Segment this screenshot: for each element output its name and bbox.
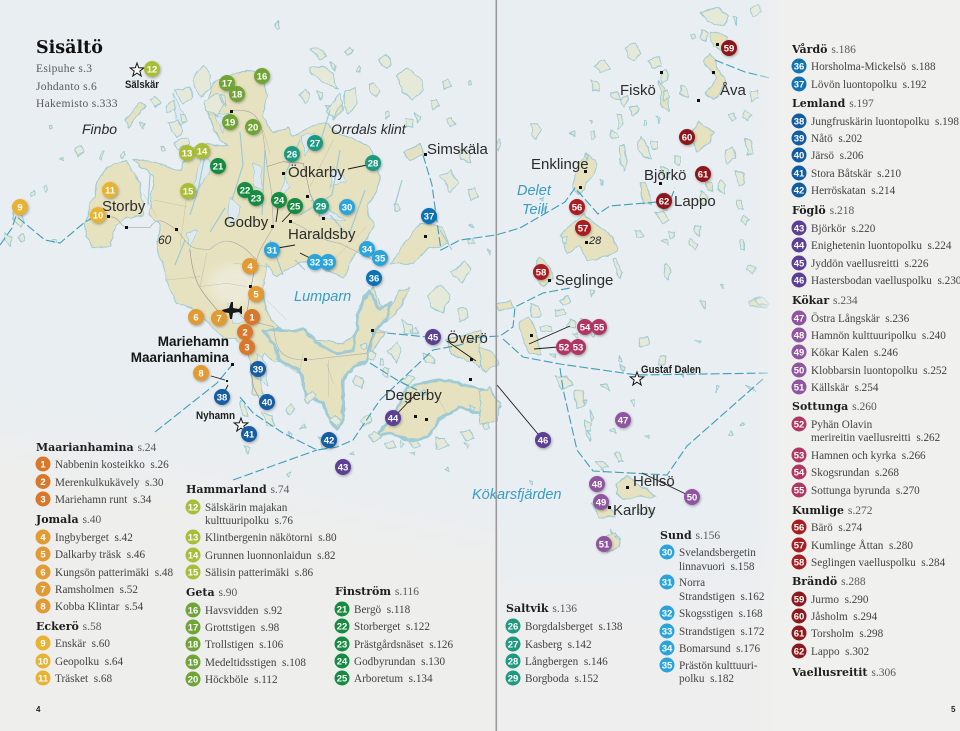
map place labels: Enklinge	[531, 156, 589, 173]
map route markers: 56	[572, 202, 582, 214]
legend: Saltvik: Kasberg s.142	[525, 639, 592, 651]
islets	[4, 21, 501, 477]
map route markers: 5	[253, 290, 259, 300]
right legend column background	[785, 0, 960, 731]
map place labels: Degerby	[385, 387, 442, 404]
map route markers: 3	[244, 342, 250, 354]
map route markers: 18	[232, 90, 242, 100]
map route markers: 22	[240, 186, 250, 196]
map route markers: 49	[596, 498, 606, 508]
legend: Finström: 25	[337, 674, 348, 684]
legend: Eckerö: 11	[38, 674, 49, 684]
legend: Sund: 31	[662, 578, 673, 588]
front matter list: Johdanto s.6	[36, 81, 97, 93]
legend: Eckerö: Eckerö s.58	[36, 620, 102, 633]
legend: Vårdö: Lövön luontopolku s.192	[811, 79, 927, 91]
map route markers: 50	[687, 492, 697, 504]
map route markers: 4	[247, 262, 253, 272]
map route markers: 24	[274, 196, 285, 206]
map route markers: 45	[428, 332, 439, 344]
map place labels	[82, 79, 747, 519]
legend: Kumlige: Bärö s.274	[811, 522, 863, 534]
map route markers: 58	[536, 268, 546, 278]
legend: Brändö	[792, 575, 884, 658]
map route markers: 25	[290, 202, 301, 212]
legend: Kökar: Hamnön kulttuuripolku s.240	[811, 330, 946, 342]
map route markers: 48	[592, 480, 602, 490]
legend: Vårdö	[791, 43, 936, 92]
legend: Eckerö	[36, 620, 123, 686]
legend: Kökar	[792, 294, 947, 394]
legend: Kökar: Kökar Kalen s.246	[811, 347, 898, 359]
legend: Sund: 33	[662, 626, 672, 638]
legend: Maarianhamina: Merenkulkukävely s.30	[55, 477, 164, 489]
map place labels: Haraldsby	[288, 226, 356, 243]
map route markers: 36	[369, 274, 379, 284]
legend: Kökar: Källskär s.254	[811, 382, 879, 394]
map route markers: 62	[659, 196, 669, 208]
map route markers: 38	[217, 392, 227, 404]
front matter list	[36, 63, 118, 110]
map place labels: Seglinge	[555, 272, 613, 289]
Lemland peninsula	[263, 290, 390, 430]
map place labels: 60	[158, 233, 172, 247]
legend: Eckerö: Geopolku s.64	[55, 656, 123, 668]
map route markers: 21	[213, 162, 224, 172]
legend: Maarianhamina: 2	[40, 477, 46, 488]
legend: Kökar: 49	[794, 348, 804, 358]
icon: star Gustaf Dalen	[630, 372, 644, 385]
map route markers: 12	[147, 64, 157, 76]
legend: Kökar: Klobbarsin luontopolku s.252	[811, 365, 947, 377]
legend: Kökar: Östra Långskär s.236	[811, 313, 910, 325]
legend: Jomala: Ramsholmen s.52	[55, 584, 138, 596]
legend: Föglö: Föglö s.218	[792, 204, 854, 217]
legend: Sund: polku s.182	[679, 673, 734, 685]
legend: Brändö: Brändö s.288	[792, 575, 866, 588]
map route markers: 31	[267, 246, 278, 256]
legend: Sottunga: Pyhän Olavin	[811, 419, 873, 431]
legend: Kumlige: Kumlige s.272	[792, 504, 873, 517]
legend: Kumlige: 57	[794, 540, 804, 552]
map place labels: Delet	[517, 183, 552, 199]
legend: Brändö: 59	[794, 594, 804, 606]
title: Sisältö	[36, 38, 103, 58]
map route markers: 28	[368, 158, 378, 170]
legend: Saltvik	[506, 602, 623, 686]
legend: Geta: Höckböle s.112	[205, 674, 278, 686]
map route markers: 51	[599, 540, 610, 550]
legend: Hammarland: 14	[188, 550, 199, 562]
map place labels: Storby	[102, 198, 146, 215]
map place labels: Kökarsfjärden	[472, 487, 561, 503]
legend: Geta: Medeltidsstigen s.108	[205, 657, 306, 669]
legend: Lemland: Nåtö s.202	[811, 133, 862, 145]
centre gutter line	[496, 0, 497, 731]
legend: Sottunga: Sottunga s.260	[792, 400, 877, 413]
legend: Sund: Sund s.156	[660, 529, 720, 542]
legend: Finström	[334, 585, 454, 686]
roads	[109, 110, 387, 400]
legend: Finström: Finström s.116	[335, 585, 419, 598]
legend: Geta: Grottstigen s.98	[205, 622, 280, 634]
map route markers: 19	[225, 118, 235, 128]
legend: Sund: Svelandsbergetin	[679, 547, 756, 559]
legend: Kökar: 50	[794, 366, 804, 376]
legend: Maarianhamina: Nabbenin kosteikko s.26	[55, 459, 169, 471]
legend: Föglö: Hastersbodan vaelluspolku s.230	[811, 275, 960, 287]
legend: Jomala: 6	[40, 568, 46, 578]
map place labels: 28	[588, 235, 602, 247]
map route markers: 26	[287, 150, 297, 160]
legend: Vårdö: 36	[794, 62, 804, 72]
map route markers: 33	[323, 258, 333, 268]
map place labels: Godby	[224, 214, 269, 231]
legend: Hammarland: 12	[188, 502, 198, 514]
map route markers	[12, 40, 737, 552]
legend: Lemland: 42	[794, 186, 804, 196]
map route markers: 42	[324, 436, 334, 446]
legend: Hammarland: 15	[188, 568, 199, 578]
legend: Finström: 21	[337, 604, 348, 616]
dashed ferry routes	[0, 60, 770, 480]
legend: Sottunga: 55	[794, 486, 805, 496]
legend: Sund: linnavuori s.158	[679, 561, 755, 573]
map place labels: Finbo	[82, 121, 117, 137]
legend: Geta: 18	[188, 640, 198, 650]
map route markers: 23	[251, 194, 261, 204]
legend: Sottunga: Skogsrundan s.268	[811, 467, 899, 479]
legend: Finström: Storberget s.122	[354, 621, 430, 633]
page number left: 4	[36, 705, 41, 714]
map route markers: 29	[316, 202, 326, 212]
legend: Jomala: 7	[40, 584, 46, 596]
map place labels: Teili	[522, 202, 548, 218]
legend: Saltvik: 29	[508, 674, 518, 684]
legend: Saltvik: Långbergen s.146	[525, 656, 608, 668]
legend: Finström: Arboretum s.134	[354, 673, 433, 685]
legend: Kumlige: 58	[794, 558, 804, 568]
legend: Brändö: Lappo s.302	[811, 646, 869, 658]
map route markers: 15	[183, 186, 194, 198]
map place labels: Lappo	[674, 193, 716, 210]
map route markers: 41	[244, 430, 255, 440]
map route markers: 46	[538, 436, 548, 446]
inlets on land	[148, 110, 452, 275]
map place labels: Karlby	[613, 502, 656, 519]
legend: Saltvik: Borgboda s.152	[525, 673, 598, 685]
pale upland patch	[209, 265, 261, 305]
legend: Eckerö: 9	[40, 638, 46, 650]
legend: Kumlige: 56	[794, 522, 804, 534]
settlement dots and leader lines	[107, 43, 719, 509]
map route markers: 40	[262, 398, 272, 408]
legend: Lemland: 41	[794, 168, 805, 180]
legend: Hammarland: Sälskärin majakan	[205, 502, 288, 514]
map route markers: 16	[257, 72, 267, 82]
legend: Jomala: 8	[40, 602, 46, 612]
legend: Jomala: Ingbyberget s.42	[55, 532, 133, 544]
legend: Lemland: 39	[794, 134, 804, 144]
legend: Vårdö: 37	[794, 80, 804, 90]
legend: Sund: 35	[662, 660, 673, 672]
map route markers: 34	[362, 244, 373, 256]
map: right page islands	[480, 4, 768, 553]
legend: Lemland: Lemland s.197	[792, 97, 874, 110]
legend: Föglö: 44	[794, 240, 805, 252]
legend: Brändö: 61	[794, 628, 805, 640]
legend: Hammarland: Grunnen luonnonlaidun s.82	[205, 550, 336, 562]
legend: Sottunga: 52	[794, 420, 804, 430]
legend: Saltvik: Borgdalsberget s.138	[525, 621, 623, 633]
legend: Finström: 24	[337, 656, 348, 668]
legend: Jomala: 5	[40, 550, 46, 560]
legend: Jomala	[35, 513, 173, 614]
map route markers: 55	[594, 322, 605, 334]
map route markers: 7	[216, 314, 222, 324]
legend: Hammarland: Klintbergenin näkötorni s.80	[205, 532, 337, 544]
legend: Saltvik: 28	[508, 656, 518, 668]
legend: Maarianhamina: Maarianhamina s.24	[36, 441, 157, 454]
legend: Kökar: Kökar s.234	[792, 294, 858, 307]
legend: Hammarland: kulttuuripolku s.76	[205, 515, 293, 527]
map route markers: 17	[222, 78, 232, 90]
legend: Hammarland: Hammarland s.74	[186, 483, 290, 496]
legend: Jomala: 4	[40, 532, 46, 544]
legend: Finström: 22	[337, 622, 347, 632]
legend: Geta: Havsvidden s.92	[205, 605, 282, 617]
legend: Brändö: 62	[794, 646, 804, 658]
map route markers: 54	[580, 322, 591, 334]
map place labels: Simskäla	[427, 141, 489, 158]
front matter list: Esipuhe s.3	[36, 63, 92, 75]
legend: Hammarland: Sälisin patterimäki s.86	[205, 567, 314, 579]
map route markers: 52	[559, 342, 569, 354]
legend: Sottunga	[792, 400, 940, 498]
legend: Sottunga: 53	[794, 450, 804, 462]
Föglö	[373, 380, 500, 440]
legend: Lemland: 40	[794, 150, 804, 162]
map place labels: Lumparn	[294, 289, 351, 305]
legend: Eckerö: 10	[38, 656, 48, 668]
legend: Maarianhamina: 3	[40, 494, 46, 506]
map route markers: 59	[724, 44, 734, 54]
legend: Föglö: 43	[794, 224, 804, 234]
legend: Geta: 17	[188, 622, 198, 634]
page number right: 5	[951, 705, 956, 714]
legend: Sund	[660, 529, 764, 685]
map place labels: Åva	[720, 82, 747, 99]
legend: Brändö: 60	[794, 612, 804, 622]
legend: Jomala: Jomala s.40	[35, 513, 102, 526]
map route markers: 30	[342, 202, 352, 214]
legend: Lemland: Järsö s.206	[811, 150, 864, 162]
legend: Kumlige: Kumlinge Åttan s.280	[811, 540, 913, 552]
legend: Maarianhamina: 1	[40, 460, 46, 470]
legend: Geta: Trollstigen s.106	[205, 639, 284, 651]
legend: Finström: Prästgårdsnäset s.126	[354, 639, 454, 651]
legend: Geta	[186, 586, 306, 686]
legend: Sund: Bomarsund s.176	[679, 643, 761, 655]
icon: star Nyhamn	[234, 418, 248, 431]
inland water	[173, 93, 347, 387]
map route markers: 14	[197, 146, 208, 158]
map place labels: Ödkarby	[288, 163, 345, 181]
legend: Sund: 30	[662, 548, 672, 558]
map route markers: 8	[198, 368, 204, 380]
legend: Vårdö: Vårdö s.186	[791, 43, 856, 56]
legend: Föglö: Jyddön vaellusreitti s.226	[811, 258, 929, 270]
legend: Sund: Strandstigen s.162	[679, 591, 764, 603]
map place labels: Gustaf Dalen	[641, 364, 701, 376]
legend: Finström: Bergö s.118	[354, 604, 411, 616]
map route markers: 61	[698, 170, 709, 180]
legend: Geta: 20	[188, 674, 198, 686]
legend: Föglö: Björkör s.220	[811, 223, 876, 235]
legend: Sottunga: 54	[794, 468, 805, 478]
legend: Föglö: 46	[794, 276, 804, 286]
legend: Geta: 19	[188, 658, 198, 668]
legend: Föglö: 45	[794, 258, 805, 270]
legend: Jomala: Kungsön patterimäki s.48	[55, 567, 173, 579]
legend: Sund: Strandstigen s.172	[679, 626, 764, 638]
map place labels: Nyhamn	[196, 410, 235, 422]
map route markers: 1	[249, 312, 255, 324]
legend: Geta: Geta s.90	[186, 586, 238, 599]
map place labels: Maarianhamina	[131, 350, 229, 365]
map route markers: 27	[310, 138, 320, 150]
legend: Maarianhamina	[36, 441, 169, 506]
map route markers: 6	[193, 312, 199, 324]
legend: Sund: 32	[662, 608, 672, 620]
legend: Brändö: Jåsholm s.294	[811, 611, 878, 623]
map route markers: 9	[17, 202, 23, 214]
legend: Lemland: 38	[794, 116, 804, 128]
right map edge fade	[750, 0, 796, 731]
map route markers: 37	[424, 212, 434, 222]
map route markers: 44	[388, 414, 399, 424]
icon: star Sälskär	[130, 63, 144, 76]
legend: Sund: Norra	[679, 577, 705, 589]
map route markers: 47	[618, 416, 628, 426]
map route markers: 20	[248, 122, 258, 134]
map route markers: 43	[338, 462, 348, 474]
map route markers: 2	[242, 328, 248, 338]
legend: Finström: 23	[337, 640, 347, 650]
map route markers: 11	[105, 186, 116, 196]
map place labels: Fiskö	[620, 82, 656, 99]
legend: Saltvik: 26	[508, 622, 518, 632]
legend: Geta: 16	[188, 606, 198, 616]
map route markers: 13	[182, 148, 192, 160]
map route markers: 39	[253, 364, 263, 376]
legend: Vårdö: Horsholma-Mickelsö s.188	[811, 61, 936, 73]
legend: Saltvik: 27	[508, 640, 518, 650]
front matter list: Hakemisto s.333	[36, 98, 118, 110]
legend: Kumlige	[792, 504, 946, 570]
legend: Föglö	[792, 204, 960, 288]
legend: Vaellusreitit: Vaellusreitit s.306	[791, 666, 896, 679]
legend: Jomala: Kobba Klintar s.54	[55, 601, 144, 613]
legend: Sottunga: Hamnen och kyrka s.266	[811, 450, 926, 462]
map place labels: Överö	[447, 329, 488, 347]
map route markers: 57	[578, 224, 588, 234]
map place labels: Björkö	[644, 167, 687, 184]
map route markers: 10	[93, 210, 103, 222]
legend: Finström: Godbyrundan s.130	[354, 656, 445, 668]
legend: Maarianhamina: Mariehamn runt s.34	[55, 494, 152, 506]
map route markers: 60	[682, 132, 692, 144]
legend: Kökar: 47	[794, 314, 804, 324]
map place labels: Mariehamn	[158, 334, 229, 349]
icon: airplane	[222, 302, 242, 319]
legend: Lemland: Jungfruskärin luontopolku s.198	[811, 116, 959, 128]
legend: Sund: Skogsstigen s.168	[679, 608, 763, 620]
map place labels: Orrdals klint	[331, 121, 407, 137]
legend: Eckerö: Enskär s.60	[55, 638, 110, 650]
legend: Kumlige: Seglingen vaelluspolku s.284	[811, 557, 946, 569]
legend: Hammarland	[186, 483, 337, 580]
map route markers: 35	[375, 254, 386, 264]
legend: Sund: Prästön kulttuuri-	[679, 660, 758, 672]
legend: Lemland: Stora Båtskär s.210	[811, 168, 902, 180]
legend: Saltvik: Saltvik s.136	[506, 602, 577, 615]
map route markers: 32	[310, 258, 320, 268]
map: left page Åland main islands	[4, 21, 501, 477]
legend: Hammarland: 13	[188, 532, 198, 544]
legend: Föglö: Enighetenin luontopolku s.224	[811, 240, 952, 252]
legend: Eckerö: Träsket s.68	[55, 673, 112, 685]
legend: Kökar: 51	[794, 382, 805, 394]
legend: Sottunga: merireitin vaellusreitti s.262	[811, 432, 940, 444]
legend: Sottunga: Sottunga byrunda s.270	[811, 485, 920, 497]
legend: Lemland	[792, 97, 959, 198]
map place labels: Hellsö	[633, 473, 675, 490]
legend: Lemland: Herröskatan s.214	[811, 185, 896, 197]
map place labels: Sälskär	[125, 79, 160, 91]
legend: Brändö: Jurmo s.290	[811, 594, 869, 606]
legend: Jomala: Dalkarby träsk s.46	[55, 549, 146, 561]
legend: Brändö: Torsholm s.298	[811, 628, 884, 640]
legend: Sund: 34	[662, 644, 673, 654]
legend: Kökar: 48	[794, 330, 804, 342]
map route markers: 53	[573, 342, 583, 354]
